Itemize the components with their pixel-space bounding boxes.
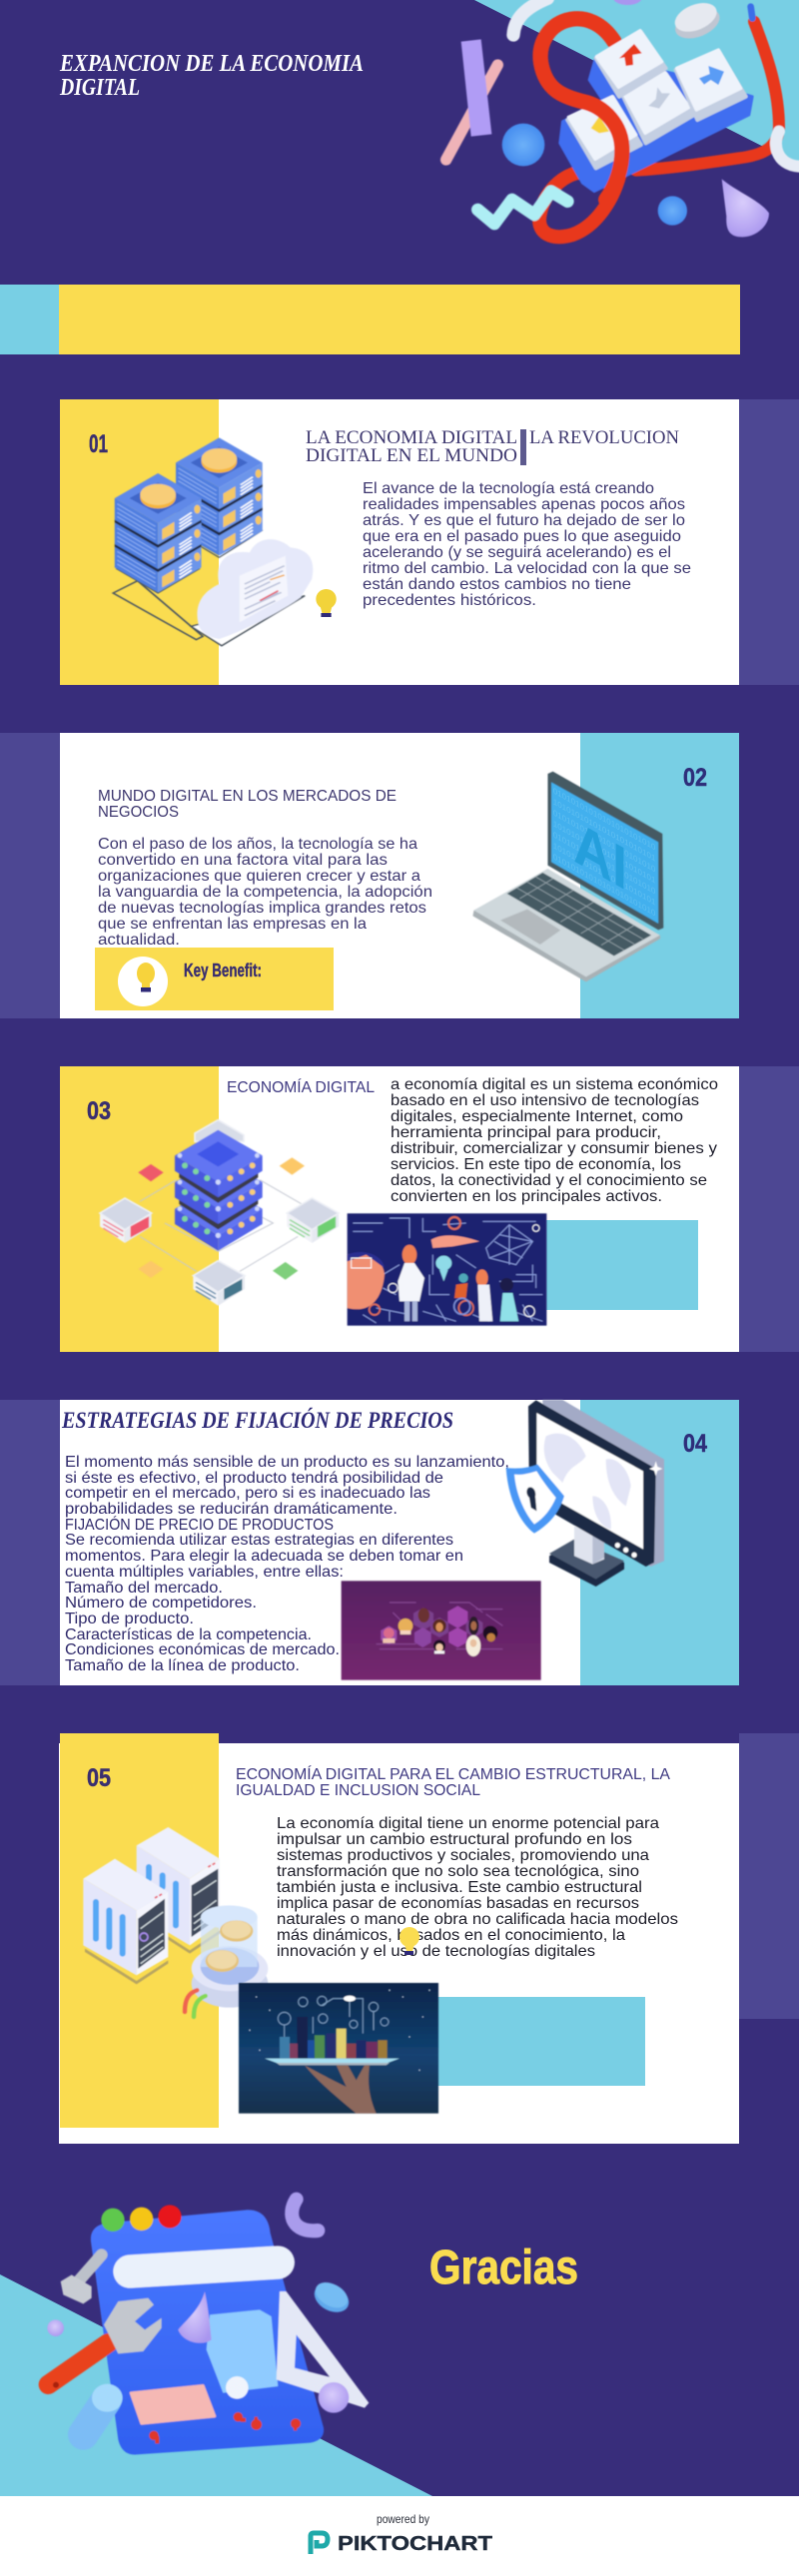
heading: LA ECONOMIA DIGITAL <box>306 427 517 448</box>
body text: El avance de la tecnología está creando <box>363 480 654 497</box>
wordmark: PIKTOCHART <box>338 2533 492 2555</box>
body text: actualidad. <box>98 932 180 949</box>
body text: están dando estos cambios no tiene <box>363 576 631 593</box>
body text <box>98 836 432 949</box>
heading: ECONOMÍA DIGITAL PARA EL CAMBIO ESTRUCTURAL, LA <box>236 1764 670 1783</box>
body text: organizaciones que quieren crecer y estar a <box>98 868 420 885</box>
body text: implica pasar de economías basadas en recursos <box>277 1895 639 1912</box>
body text: basado en el uso intensivo de tecnologías <box>391 1092 699 1109</box>
body text: Tamaño del mercado. <box>65 1580 223 1597</box>
panel: 05 cambio estructural <box>59 1733 799 2144</box>
cyan block <box>546 1220 698 1310</box>
heading <box>236 1764 670 1799</box>
icon: laptop with AI screen: 01010101010101010101010 <box>553 808 656 875</box>
icon: laptop with AI screen: 01010101010101010101010 <box>553 852 656 919</box>
closing section <box>0 2200 578 2496</box>
photo: women in technology <box>342 1581 541 1680</box>
body text: Tamaño de la línea de producto. <box>65 1657 300 1674</box>
body text: atrás. Y es que el futuro ha dejado de ser lo <box>363 512 685 529</box>
body text: distribuir, comercializar y consumir bienes y <box>391 1140 717 1157</box>
callout: key benefit: Key Benefit: <box>184 961 262 980</box>
body text: impulsar un cambio estructural profundo en los <box>277 1831 632 1848</box>
header: title and keyboard illustration <box>59 0 799 237</box>
body text <box>391 1076 718 1205</box>
icon: laptop with AI screen: 01010101010101010101010 <box>553 830 656 897</box>
body text: FIJACIÓN DE PRECIO DE PRODUCTOS <box>65 1515 334 1534</box>
icon: isometric server network <box>100 1120 339 1306</box>
heading: LA REVOLUCION <box>529 427 679 448</box>
icon: Piktochart logo mark <box>311 2533 328 2554</box>
body text: ritmo del cambio. La velocidad con la que se <box>363 560 691 577</box>
number 04: 04 <box>683 1430 707 1458</box>
icon: 3D keyboard with arrows and red cable <box>446 0 799 237</box>
icon: server stacks and cloud document <box>113 437 313 646</box>
body text: El momento más sensible de un producto es su lanzamiento, <box>65 1454 509 1471</box>
body text: transformación que no solo sea tecnológica, sino <box>277 1863 639 1880</box>
heading: ECONOMÍA DIGITAL <box>227 1077 375 1096</box>
body text: convertido en una factora vital para las <box>98 852 388 869</box>
body text: datos, la conectividad y el conocimiento se <box>391 1172 707 1189</box>
icon: laptop with AI screen <box>472 772 663 981</box>
icon: laptop with AI screen: 10101010101010101010101 <box>553 819 656 886</box>
title <box>59 51 364 101</box>
body text: La economía digital tiene un enorme potencial para <box>277 1815 659 1832</box>
body text <box>277 1815 678 1960</box>
powered by label: powered by <box>377 2512 429 2526</box>
icon: monitor with security shield <box>506 1400 664 1587</box>
callout: key benefit <box>95 948 334 1010</box>
cyan bottom triangle <box>0 2274 432 2496</box>
heading: DIGITAL EN EL MUNDO <box>306 445 517 466</box>
icon: 3D app board with tools <box>47 2200 369 2454</box>
title: EXPANCION DE LA ECONOMIA <box>59 51 364 77</box>
cyan block <box>437 1997 645 2086</box>
body text: Número de competidores. <box>65 1595 257 1611</box>
body text: cuenta múltiples variables, entre ellas: <box>65 1564 344 1581</box>
body text: Tipo de producto. <box>65 1610 194 1627</box>
number 05: 05 <box>87 1764 111 1792</box>
body text <box>363 480 691 609</box>
cyan corner triangle <box>474 0 799 165</box>
icon: light bulb <box>316 589 337 617</box>
title: DIGITAL <box>59 75 140 101</box>
body text: a economía digital es un sistema económico <box>391 1076 718 1093</box>
body text: realidades impensables apenas pocos años <box>363 496 685 513</box>
footer: powered by Piktochart <box>0 2496 799 2576</box>
body text: Condiciones económicas de mercado. <box>65 1641 340 1658</box>
number 02: 02 <box>683 764 707 792</box>
body text: que se enfrentan las empresas en la <box>98 916 367 933</box>
icon: servers and coins <box>83 1827 268 2017</box>
body text <box>65 1454 509 1674</box>
body text: Características de la competencia. <box>65 1626 312 1643</box>
body text: herramienta principal para producir, <box>391 1124 661 1141</box>
body text: sistemas productivos y sociales, promoviendo una <box>277 1847 649 1864</box>
body text: la vanguardia de la competencia, la adopción <box>98 884 432 901</box>
heading: IGUALDAD E INCLUSION SOCIAL <box>236 1782 480 1799</box>
body text: convierten en los principales activos. <box>391 1188 662 1205</box>
body text: innovación y el uso de tecnologías digitales <box>277 1943 595 1960</box>
body text: de nuevas tecnologías implica grandes retos <box>98 900 426 917</box>
icon: laptop with AI screen: AI <box>573 807 627 904</box>
panel: 03 economia digital <box>60 1066 799 1352</box>
photo: hand holding digital city <box>239 1983 438 2114</box>
thank you text: Gracias <box>429 2242 578 2294</box>
top banner <box>0 285 740 354</box>
icon: laptop with AI screen: 01010101010101010101010 <box>553 786 656 853</box>
heading: NEGOCIOS <box>98 804 179 821</box>
body text: también justa e inclusiva. Este cambio estructural <box>277 1879 642 1896</box>
body text: Con el paso de los años, la tecnología se ha <box>98 836 417 853</box>
panel: 02 mundo digital <box>0 733 739 1018</box>
body text: servicios. En este tipo de economía, los <box>391 1156 681 1173</box>
number 01: 01 <box>89 430 108 458</box>
body text: naturales o mano de obra no calificada hacia modelos <box>277 1911 678 1928</box>
photo: digital economy illustration <box>348 1213 546 1326</box>
body text: momentos. Para elegir la adecuada se deben tomar en <box>65 1548 463 1565</box>
panel: 04 estrategias de fijacion de precios <box>0 1400 739 1685</box>
body text: más dinámicos, basados en el conocimiento, la <box>277 1927 625 1944</box>
heading: ESTRATEGIAS DE FIJACIÓN DE PRECIOS <box>61 1407 453 1433</box>
body text: probabilidades se reducirán dramáticamente. <box>65 1501 398 1518</box>
icon: laptop with AI screen: 10101010101010101010101 <box>553 797 656 864</box>
body text: precedentes históricos. <box>363 592 536 609</box>
body text: Se recomienda utilizar estas estrategias en diferentes <box>65 1532 453 1549</box>
heading: MUNDO DIGITAL EN LOS MERCADOS DE <box>98 788 397 805</box>
heading <box>306 427 679 466</box>
body text: digitales, especialmente Internet, como <box>391 1108 683 1125</box>
number 03: 03 <box>87 1097 111 1125</box>
heading <box>98 788 397 821</box>
body text: que era en el pasado pues lo que aseguido <box>363 528 681 545</box>
panel: 01 la economia digital <box>60 399 799 685</box>
body text: competir en el mercado, pero si es inadecuado las <box>65 1485 430 1502</box>
icon: laptop with AI screen: 10101010101010101010101 <box>553 841 656 908</box>
body text: acelerando (y se seguirá acelerando) es el <box>363 544 671 561</box>
icon: light bulb <box>400 1927 419 1955</box>
body text: si éste es efectivo, el producto tendrá posibilidad de <box>65 1470 443 1487</box>
